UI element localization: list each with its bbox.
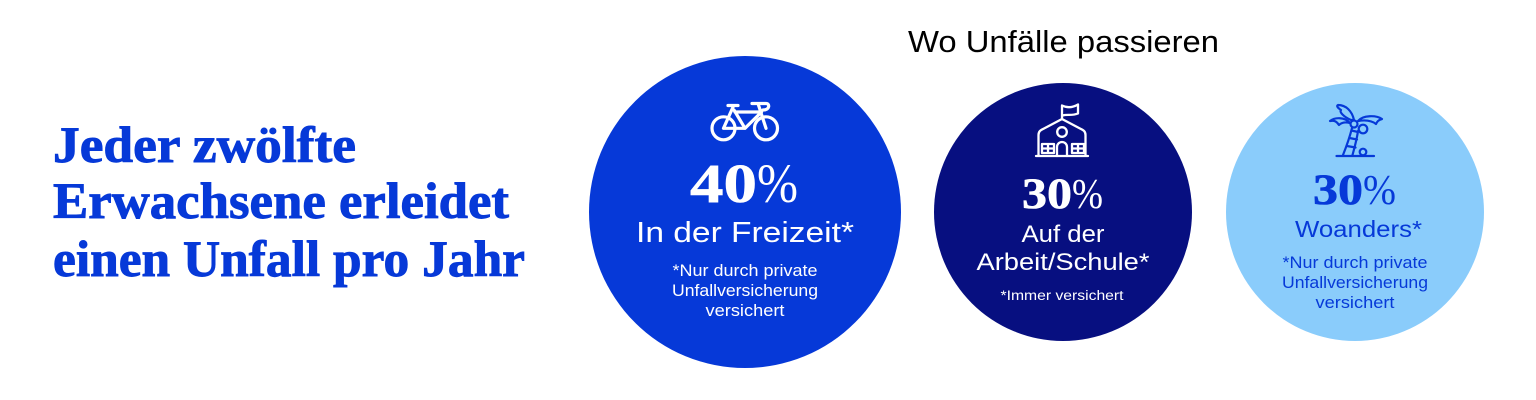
label: Woanders: Woanders* (1295, 216, 1422, 242)
value: 30%: % (1363, 168, 1396, 214)
heading: Jeder zwölfte Erwachsene erleidet einen Unfall pro Jahr: Jeder zwölfte (53, 118, 356, 174)
value: 30%: 30 (1022, 171, 1072, 218)
panel: Arbeit/Schule 30% (934, 83, 1192, 341)
value: 30% (1022, 171, 1103, 218)
label: Auf der Arbeit/Schule: Arbeit/Schule* (976, 249, 1150, 276)
value: 30%: % (1072, 172, 1103, 218)
value: 40% (690, 153, 798, 214)
panel: Freizeit 40% (589, 56, 901, 368)
note: private insurance: *Nur durch private (1282, 254, 1428, 272)
note: private insurance: versichert (1316, 294, 1395, 312)
icon: bicycle (712, 104, 778, 140)
label: Auf der Arbeit/Schule (976, 221, 1150, 276)
heading: Jeder zwölfte Erwachsene erleidet einen Unfall pro Jahr (53, 118, 525, 288)
icon: palm tree (1330, 105, 1382, 156)
panel: Woanders 30% (1226, 83, 1484, 341)
heading: Jeder zwölfte Erwachsene erleidet einen Unfall pro Jahr: Erwachsene erleidet (53, 174, 509, 230)
note: private insurance: Unfallversicherung (672, 282, 818, 300)
note: private insurance: *Nur durch private (672, 262, 818, 280)
label: In der Freizeit: In der Freizeit* (636, 217, 854, 249)
note: always insured: *Immer versichert (1000, 288, 1124, 303)
value: 40%: % (757, 153, 798, 214)
icon: school (1036, 104, 1088, 156)
value: 30%: 30 (1313, 167, 1363, 214)
value: 30% (1313, 167, 1396, 214)
value: 40%: 40 (690, 153, 757, 214)
note: private insurance (1282, 254, 1428, 312)
heading: Jeder zwölfte Erwachsene erleidet einen Unfall pro Jahr: einen Unfall pro Jahr (53, 232, 525, 288)
note: private insurance: versichert (706, 302, 785, 320)
label: Auf der Arbeit/Schule: Auf der (1022, 221, 1104, 248)
chart title: Wo Unfälle passieren (908, 24, 1219, 59)
note: private insurance: Unfallversicherung (1282, 274, 1428, 292)
note: private insurance (672, 262, 818, 320)
